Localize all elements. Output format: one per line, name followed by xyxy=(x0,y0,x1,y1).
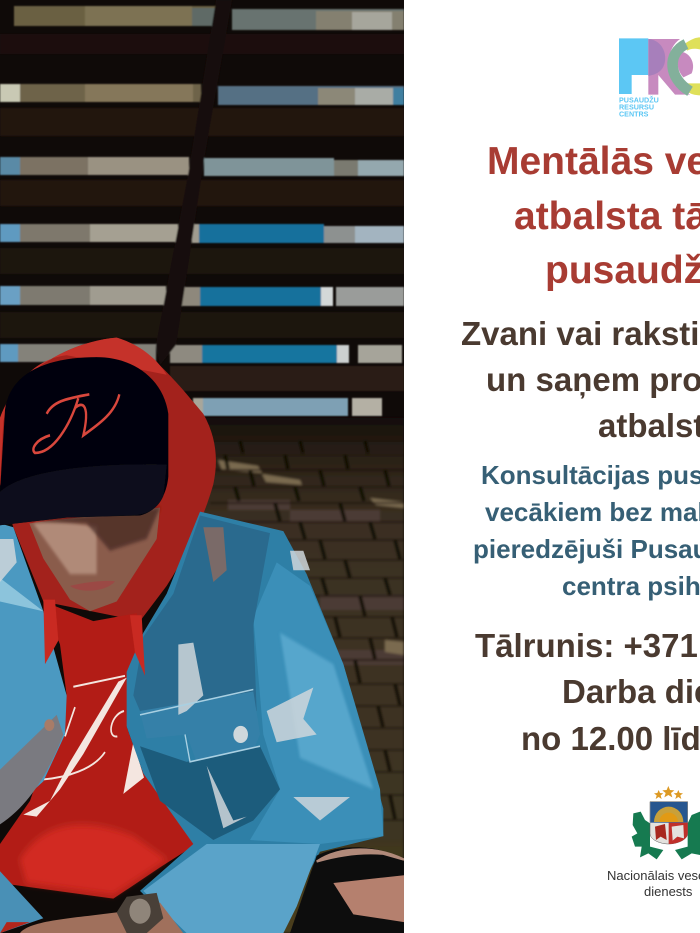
oak wreath xyxy=(632,812,700,859)
jacket left side xyxy=(0,523,67,820)
sweatshirt xyxy=(0,602,197,899)
hand and watch xyxy=(20,903,183,933)
logo text: PUSAUDŽU xyxy=(619,96,659,105)
denim jacket main xyxy=(127,512,383,933)
steps right xyxy=(232,9,404,30)
brick floor xyxy=(200,418,404,933)
shield xyxy=(650,802,688,844)
figure xyxy=(0,338,404,933)
risers xyxy=(0,34,404,54)
title xyxy=(487,140,700,292)
jacket distress marks xyxy=(0,539,350,828)
panel: photo of teenager in red hoodie and denim jacket on stairs xyxy=(0,0,404,933)
hood xyxy=(0,338,216,621)
sweatshirt lettering xyxy=(23,676,144,817)
icon: Latvian coat of arms xyxy=(632,786,700,860)
subtitle xyxy=(461,315,700,444)
logo mark xyxy=(619,37,700,95)
logo text: RESURSU xyxy=(619,103,654,111)
logo: Pusaudžu Resursu Centrs xyxy=(619,37,700,119)
text block: consultations description xyxy=(473,460,700,600)
stars xyxy=(654,786,683,799)
logo text xyxy=(619,96,659,119)
logo text: CENTRS xyxy=(619,111,649,119)
text: Nacionālais veselības dienests: dienests xyxy=(644,884,692,899)
central stringer xyxy=(156,0,232,365)
cap xyxy=(0,357,168,525)
ripped jeans xyxy=(290,847,404,933)
face xyxy=(29,508,160,611)
cap monogram xyxy=(33,394,119,453)
hood strings xyxy=(43,600,145,676)
steps left xyxy=(14,6,215,26)
contact details xyxy=(475,627,700,756)
text: Nacionālais veselības dienests xyxy=(607,868,700,899)
